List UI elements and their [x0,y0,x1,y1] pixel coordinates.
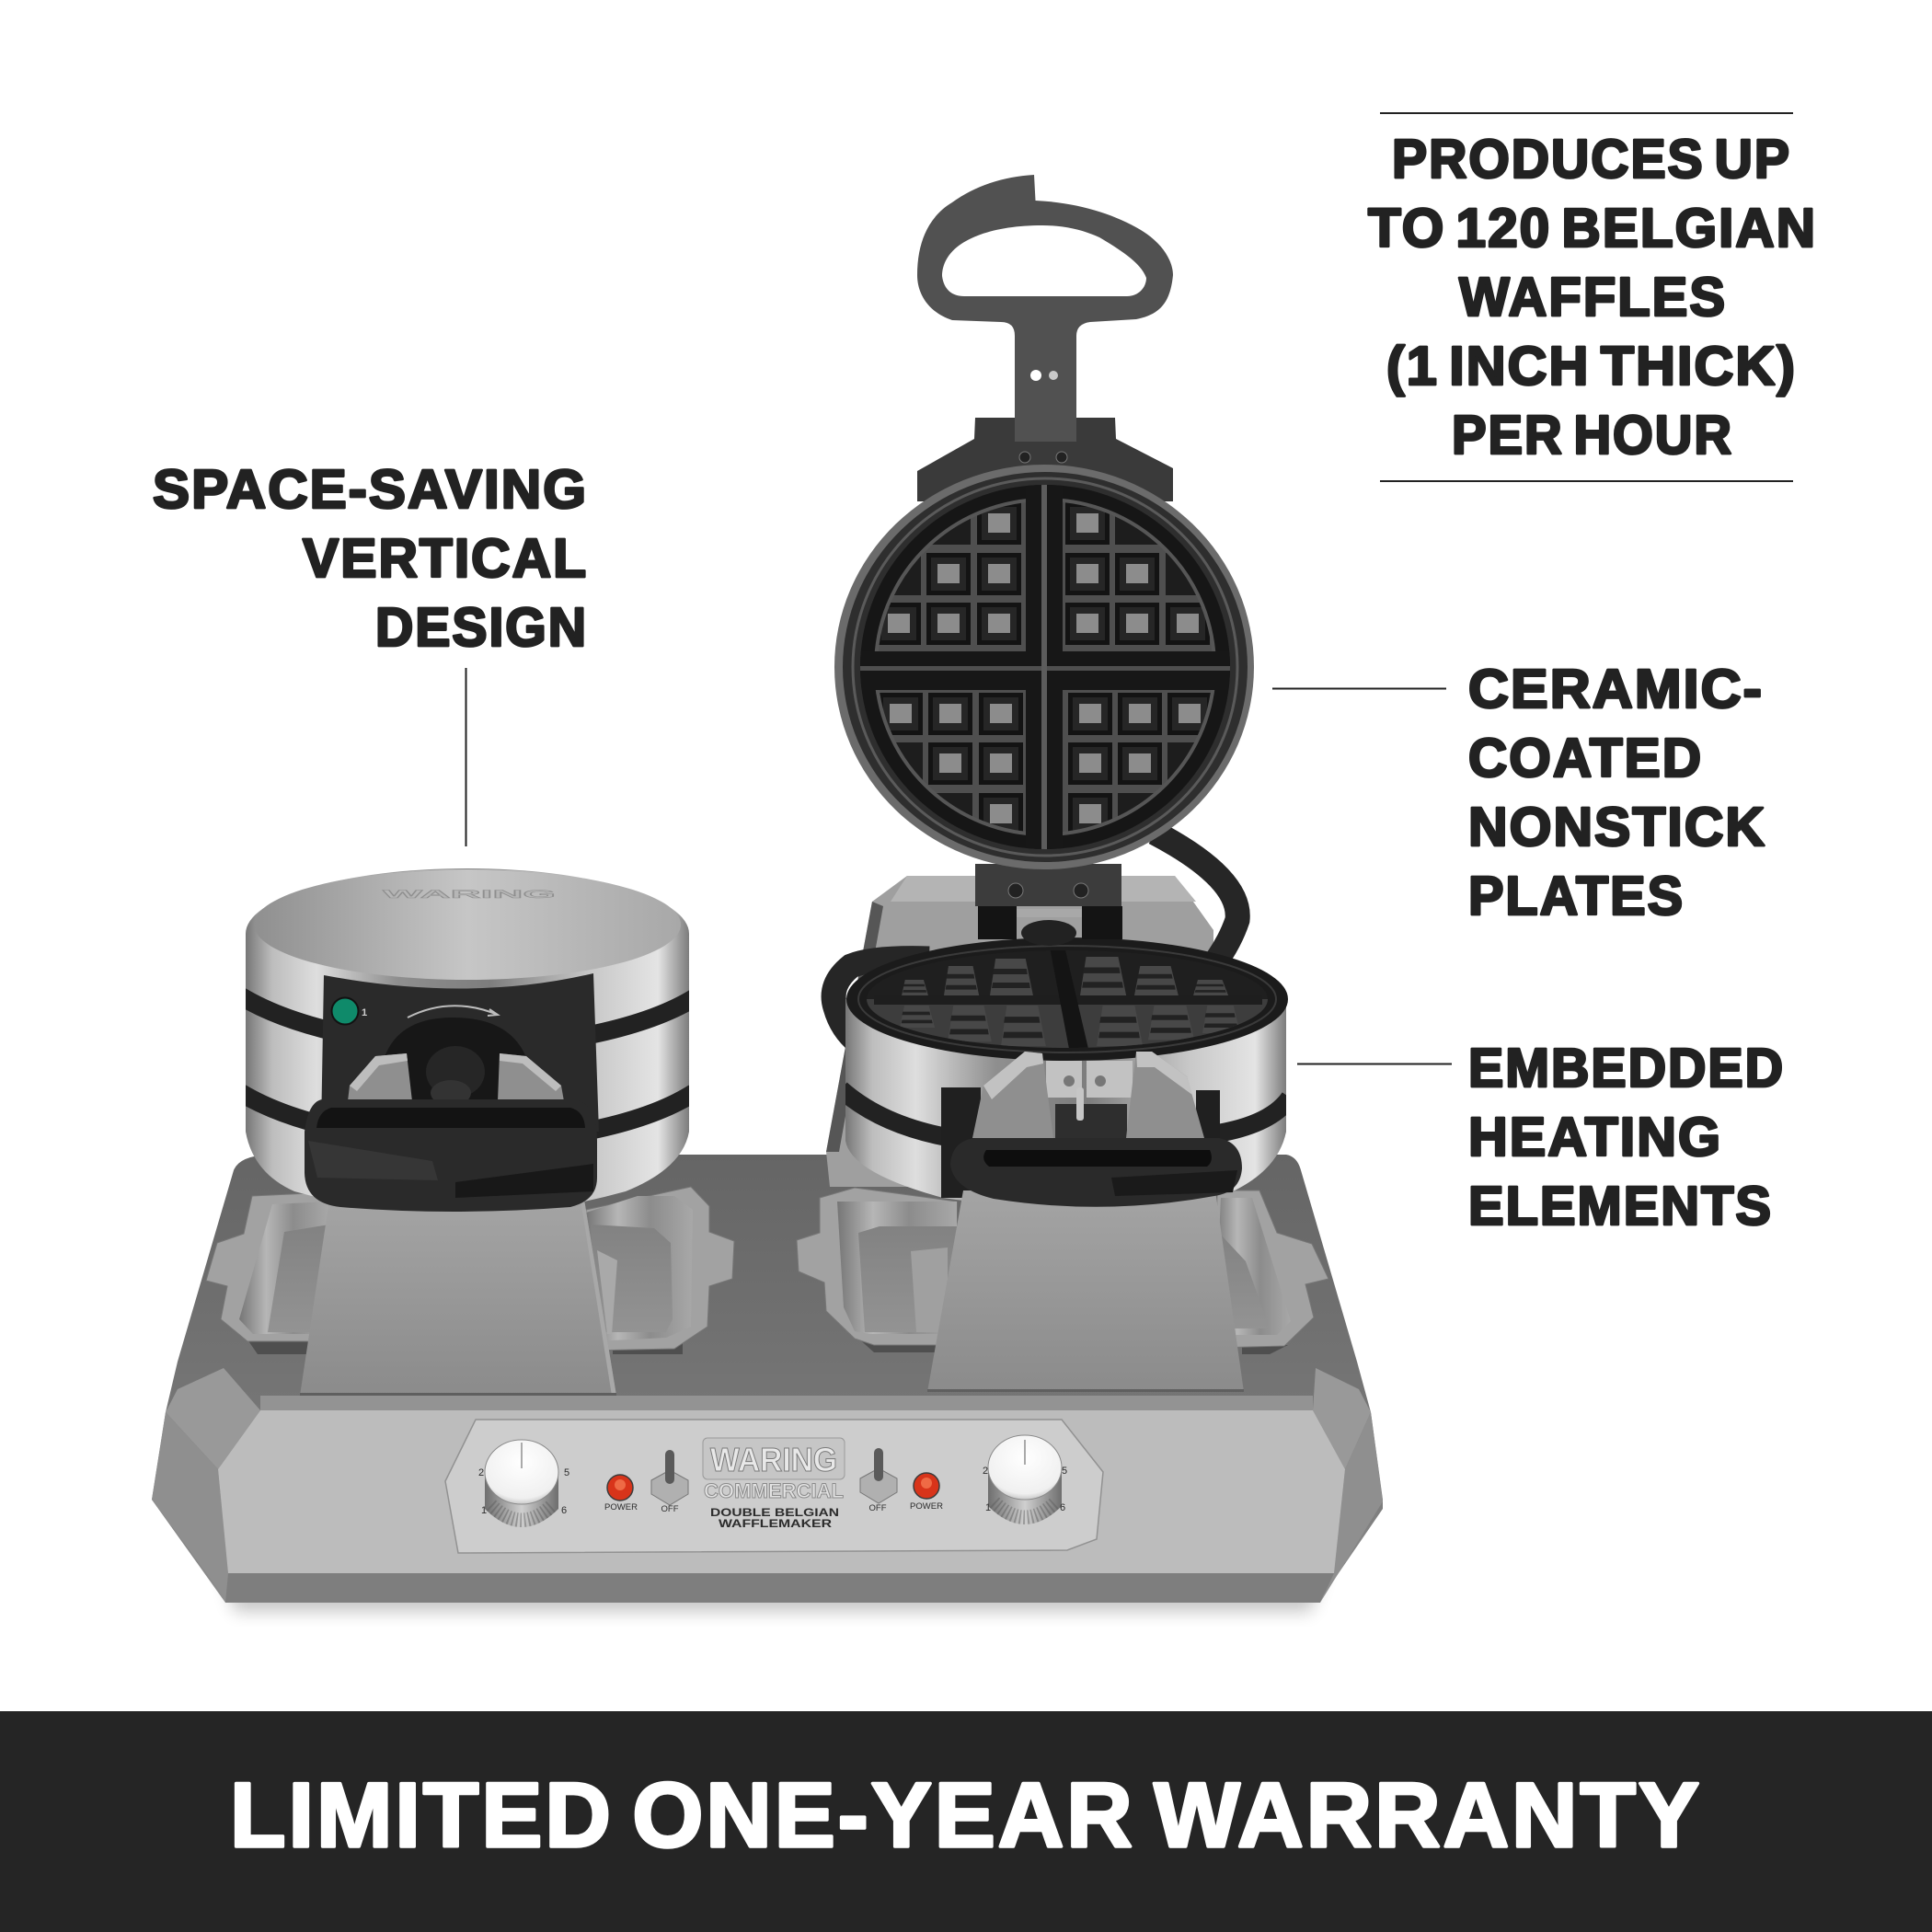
heading: embedded heating elements [1468,1038,1785,1236]
right drip trays [797,1188,1328,1354]
heading: embedded heating elements: EMBEDDED [1468,1038,1785,1098]
control panel [445,1420,1103,1553]
product: double waffle maker [152,175,1383,1612]
dial numbers [478,1466,1067,1516]
handle holes [1030,370,1058,381]
panel labels: OFF [868,1503,887,1513]
warranty banner [0,1711,1932,1932]
panel labels [604,1501,943,1514]
base unit [152,1155,1383,1603]
bottom right cells [1068,693,1212,835]
top right cells [1065,502,1210,645]
heading: produces up to 120 waffles [1368,113,1817,481]
dial numbers: 2 [983,1466,988,1477]
heading: ceramic-coated nonstick plates: PLATES [1468,866,1685,926]
heading: ceramic-coated nonstick plates: NONSTICK [1468,797,1766,857]
heading: ceramic-coated nonstick plates: COATED [1468,728,1703,788]
power lights [607,1473,939,1501]
heading: produces up to 120 waffles: PER HOUR [1452,405,1733,466]
waring commercial logo: WARING [710,1441,837,1478]
dial numbers: 6 [561,1505,567,1516]
upper waffle plate and handle [834,175,1254,946]
product name [710,1508,839,1530]
black handle [950,1138,1242,1207]
heading: space-saving vertical design [153,459,588,658]
toggle switches [651,1448,897,1505]
heading: produces up to 120 waffles: (1 INCH THICK) [1386,336,1797,397]
handle supports [348,1053,564,1101]
heading: ceramic-coated nonstick plates: CERAMIC- [1468,659,1764,719]
rotation arrow [408,1006,498,1018]
top left cells [877,502,1021,645]
power cord [834,833,1237,1044]
right knob [988,1435,1062,1524]
warranty banner: LIMITED ONE-YEAR WARRANTY [230,1764,1702,1866]
stand [927,1190,1244,1392]
lid [246,868,689,999]
leader line: heating elements [1297,1064,1452,1065]
body [246,934,689,1214]
lower hinge [975,864,1122,946]
lift handle [917,175,1173,442]
heading: space-saving vertical design: DESIGN [375,597,588,658]
dial numbers: 1 [985,1502,991,1513]
bottom left cells [879,693,1023,835]
product name: WAFFLEMAKER [719,1519,833,1530]
base shadow [221,1564,1325,1612]
handle supports [972,1052,1204,1138]
left drip trays [206,1187,734,1354]
product name: DOUBLE BELGIAN [710,1508,839,1519]
lower plate [846,937,1288,1061]
dial numbers: 5 [564,1467,569,1478]
plate rim [834,465,1254,869]
dial numbers: 2 [478,1467,484,1478]
heading: embedded heating elements: HEATING [1468,1107,1722,1167]
heading: ceramic-coated nonstick plates [1468,659,1766,926]
heading: produces up to 120 waffles: PRODUCES UP [1392,129,1791,190]
left waffle iron closed [241,868,694,1396]
panel labels: OFF [661,1504,679,1514]
panel labels: POWER [910,1501,943,1512]
rear pedestal [826,876,1213,1187]
leader line: ceramic plates [1272,688,1446,690]
plate cross channels [856,478,1242,856]
left knob [485,1440,558,1527]
heading: produces up to 120 waffles: WAFFLES [1459,267,1727,328]
heading: embedded heating elements: ELEMENTS [1468,1176,1773,1236]
black handle [305,1099,597,1212]
dark seam [841,1089,1290,1139]
stand [300,1200,616,1396]
plate grid [878,502,1213,832]
waring commercial logo [703,1438,845,1502]
heading: space-saving vertical design: VERTICAL [303,528,588,589]
bracket [1046,1061,1133,1138]
panel labels: POWER [604,1502,638,1512]
pivot [383,1018,528,1106]
right waffle iron open [841,937,1290,1392]
dial numbers: 6 [1060,1502,1065,1513]
heading: space-saving vertical design: SPACE-SAVING [153,459,588,520]
green indicator [331,997,359,1025]
waring commercial logo: COMMERCIAL [704,1479,844,1502]
lid: WARING [383,888,556,901]
side housings [941,1087,1220,1198]
upper hinge [917,418,1173,501]
plate arc frame [876,500,1214,834]
dark seams [241,996,694,1145]
heading: produces up to 120 waffles: TO 120 BELGIAN [1368,198,1817,259]
lower body [845,999,1286,1207]
indicator label: 1 [362,1007,367,1018]
dial numbers: 1 [481,1505,487,1516]
control housing [321,973,599,1132]
dial numbers: 5 [1062,1466,1067,1477]
leader line: vertical design [466,668,467,846]
